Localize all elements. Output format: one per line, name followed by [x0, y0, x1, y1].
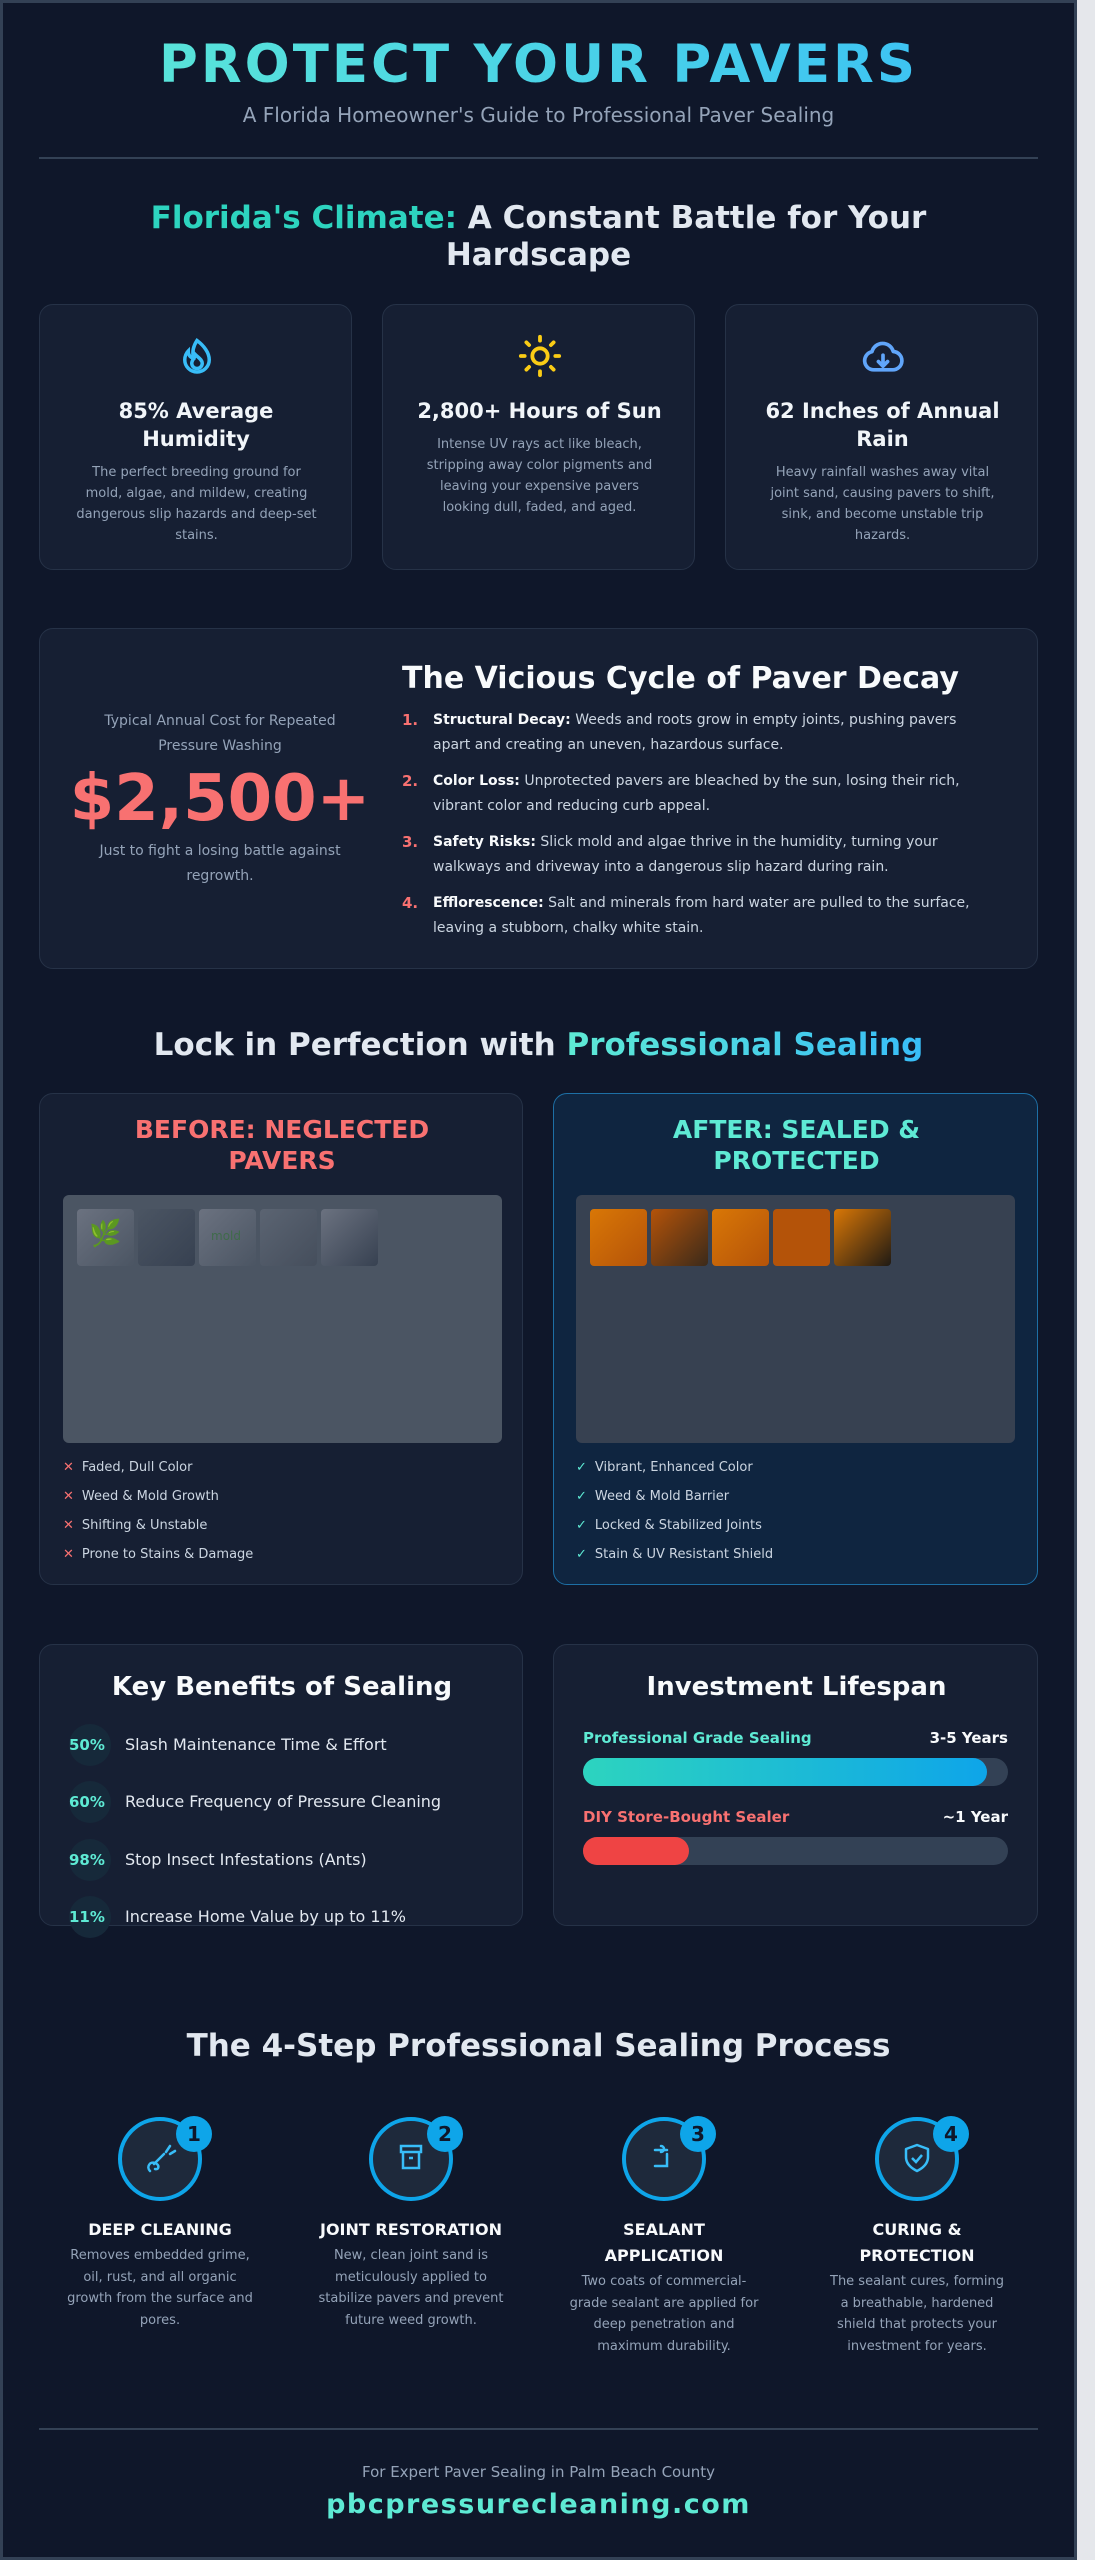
cost block: $2,500+ [70, 762, 370, 836]
before paver image: 🌿 [89, 1219, 121, 1249]
step text: The sealant cures, forming a breathable, hardened shield that protects your investment for years. [830, 2274, 1004, 2354]
before list: ✕ Shifting & Unstable [63, 1518, 207, 1533]
icon: cleaning [118, 2116, 212, 2201]
panel: key benefits: 11% [69, 1908, 105, 1926]
step 2 [319, 2116, 504, 2328]
before paver image: mold [211, 1229, 241, 1243]
icon: shield: 4 [944, 2122, 958, 2146]
after list: ✓ Locked & Stabilized Joints [576, 1518, 762, 1533]
after list [576, 1460, 773, 1562]
card title: 2,800+ Hours of Sun [417, 399, 662, 423]
panel: humidity card [39, 304, 352, 570]
bar: DIY [583, 1808, 1008, 1865]
icon: shield [875, 2116, 969, 2201]
panel: key benefits: Slash Maintenance Time & Effort [125, 1735, 387, 1754]
icon: sealant: 3 [691, 2122, 705, 2146]
panel: key benefits: 50% [69, 1736, 105, 1754]
step 1 [67, 2116, 253, 2328]
step text: Removes embedded grime, oil, rust, and all organic growth from the surface and pores. [67, 2248, 253, 2328]
panel: before [39, 1093, 523, 1585]
heading: climate: Florida's Climate: A Constant Battle for Your Hardscape [151, 200, 926, 273]
icon: sand box [369, 2116, 463, 2201]
benefits heading: Key Benefits of Sealing [112, 1672, 452, 1702]
step text: New, clean joint sand is meticulously applied to stabilize pavers and prevent future weed growth. [319, 2248, 503, 2328]
step title: JOINT RESTORATION [320, 2220, 502, 2239]
panel: vicious cycle [39, 628, 1038, 969]
step title: DEEP CLEANING [88, 2220, 232, 2239]
after paver image [576, 1195, 1015, 1443]
after list: ✓ Vibrant, Enhanced Color [576, 1460, 753, 1475]
step title: SEALANT APPLICATION [605, 2220, 723, 2265]
panel: vicious cycle: Structural Decay: Weeds and roots grow in empty joints, pushing pavers apart and creating an uneven, hazardous surface. [433, 712, 956, 753]
icon: cleaning: 1 [187, 2122, 201, 2146]
after title: AFTER: SEALED & PROTECTED [673, 1115, 920, 1175]
icon: sun [518, 334, 562, 378]
card text: The perfect breeding ground for mold, algae, and mildew, creating dangerous slip hazards and deep-set stains. [76, 465, 317, 543]
panel: rain card [725, 304, 1038, 570]
icon: sand box: 2 [438, 2122, 452, 2146]
card title: 85% Average Humidity [119, 399, 273, 451]
panel: key benefits: 60% [69, 1793, 105, 1811]
bar: professional: Professional Grade Sealing [583, 1729, 812, 1747]
panel: vicious cycle: Safety Risks: Slick mold and algae thrive in the humidity, turning your walkways and driveway into a dangerous slip hazard during rain. [433, 834, 938, 875]
before list: ✕ Faded, Dull Color [63, 1460, 192, 1475]
panel: key benefits: Increase Home Value by up to 11% [125, 1907, 406, 1926]
after list: ✓ Weed & Mold Barrier [576, 1489, 729, 1504]
panel: after [553, 1093, 1038, 1585]
card text: Heavy rainfall washes away vital joint sand, causing pavers to shift, sink, and become unstable trip hazards. [770, 465, 995, 543]
subtitle: A Florida Homeowner's Guide to Professional Paver Sealing [243, 103, 834, 127]
title: PROTECT YOUR PAVERS [159, 34, 918, 95]
panel: vicious cycle: Color Loss: Unprotected pavers are bleached by the sun, losing their rich, vibrant color and reducing curb appeal. [433, 773, 960, 814]
panel: sun card [382, 304, 695, 570]
bar: professional: 3-5 Years [930, 1729, 1008, 1747]
cost block [70, 713, 370, 884]
decay list [402, 711, 970, 936]
heading: professional sealing: Lock in Perfection with Professional Sealing [154, 1027, 923, 1063]
card title: 62 Inches of Annual Rain [765, 399, 1000, 451]
step 4 [830, 2116, 1004, 2354]
step 3 [570, 2116, 758, 2354]
before title: BEFORE: NEGLECTED PAVERS [135, 1115, 429, 1175]
panel: investment lifespan [553, 1644, 1038, 1926]
title [0, 32, 1077, 98]
bar: professional [583, 1729, 1008, 1786]
before list [63, 1460, 253, 1562]
panel: key benefits: 98% [69, 1851, 105, 1869]
heading: 4-step process: The 4-Step Professional Sealing Process [187, 2028, 890, 2064]
panel: key benefits: Stop Insect Infestations (Ants) [125, 1850, 367, 1869]
icon: water [183, 338, 211, 374]
bar: DIY: ~1 Year [943, 1808, 1008, 1826]
cost block: Just to fight a losing battle against regrowth. [99, 843, 341, 884]
card text: Intense UV rays act like bleach, stripping away color pigments and leaving your expensive pavers looking dull, faded, and aged. [427, 437, 652, 515]
panel: key benefits [39, 1644, 523, 1926]
after list: ✓ Stain & UV Resistant Shield [576, 1547, 773, 1562]
panel: vicious cycle: Efflorescence: Salt and minerals from hard water are pulled to the surface, leaving a stubborn, chalky white stain. [433, 895, 970, 936]
panel: vicious cycle: 1. [402, 711, 418, 729]
panel: vicious cycle: 3. [402, 833, 418, 851]
footer text: For Expert Paver Sealing in Palm Beach County [362, 2463, 715, 2481]
before paver image [63, 1195, 502, 1443]
step text: Two coats of commercial-grade sealant are applied for deep penetration and maximum durability. [570, 2274, 758, 2354]
icon: sealant [622, 2116, 716, 2201]
panel: vicious cycle: 4. [402, 894, 418, 912]
step title: CURING & PROTECTION [859, 2220, 975, 2265]
before list: ✕ Weed & Mold Growth [63, 1489, 219, 1504]
bar: DIY: DIY Store-Bought Sealer [583, 1808, 789, 1826]
icon: cloud [862, 342, 904, 372]
panel: vicious cycle: 2. [402, 772, 418, 790]
footer url: pbcpressurecleaning.com [326, 2489, 751, 2520]
heading: vicious cycle: The Vicious Cycle of Paver Decay [402, 661, 959, 696]
cost block: Typical Annual Cost for Repeated Pressure Washing [104, 713, 336, 754]
lifespan heading: Investment Lifespan [647, 1672, 946, 1702]
before list: ✕ Prone to Stains & Damage [63, 1547, 253, 1562]
panel: key benefits: Reduce Frequency of Pressure Cleaning [125, 1792, 441, 1811]
benefits list [69, 1724, 441, 1938]
